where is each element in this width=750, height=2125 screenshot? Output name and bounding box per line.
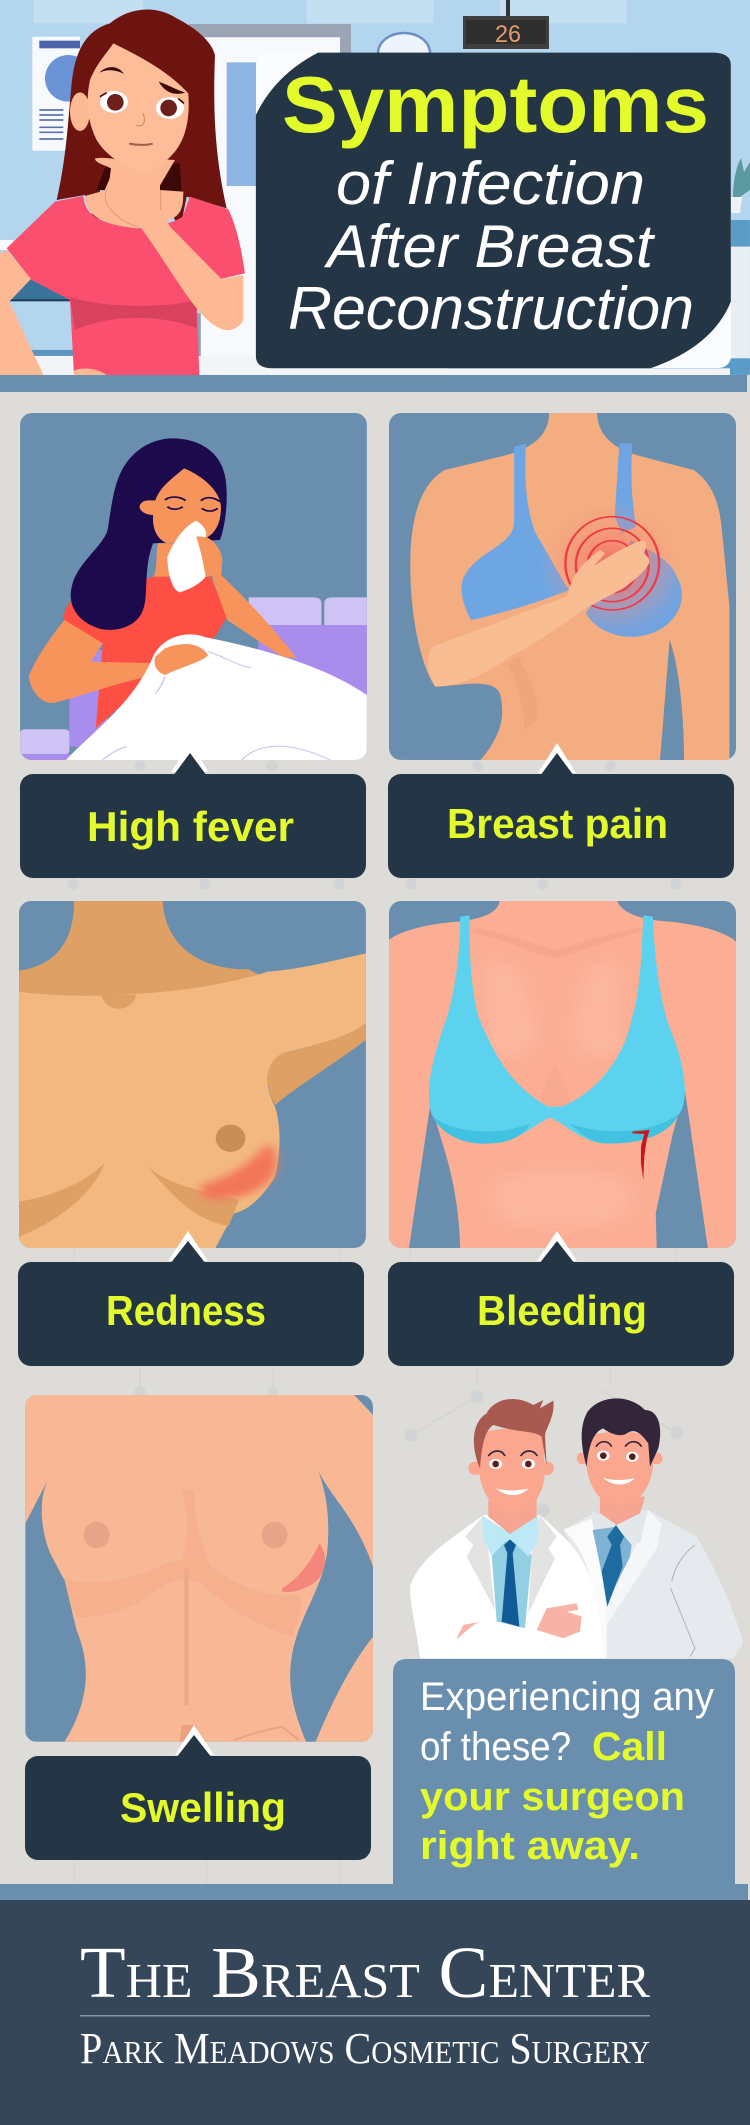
eyes and brows [99,67,185,145]
title subheading [288,150,694,342]
call to action text: right away. [420,1824,640,1868]
neck [107,163,160,200]
left arm [28,620,150,703]
footer strip [0,1884,748,1900]
label: high fever: High fever [87,803,294,850]
closed eyes [165,497,220,511]
torso [410,413,729,760]
crossed arms [537,1603,582,1638]
bra [429,915,685,1143]
title subheading: Reconstruction [288,275,694,342]
ear [70,92,90,131]
hand on tissue [196,536,222,577]
hair [71,438,227,630]
tissue [167,521,206,592]
panel: swelling [25,1395,373,1742]
areola [216,1125,245,1152]
shirt [64,577,227,728]
collar bones [471,927,643,958]
label: high fever [20,744,366,878]
footer logo line one: THE BREAST CENTER [80,1932,650,2013]
woman thinking [0,9,245,375]
pain glow [544,506,674,620]
centre line [184,1568,189,1705]
doctors [410,1398,743,1658]
panel: high fever [20,413,367,760]
breast folds [65,1560,301,1637]
right doctor [563,1398,743,1658]
call to action panel [393,1659,735,1884]
right arm [203,536,297,658]
panel: redness [19,901,366,1248]
areolae [84,1522,110,1548]
label: bleeding [388,1231,734,1366]
navel [234,1727,299,1740]
torso highlights [498,1174,626,1222]
footer rule [80,2015,650,2016]
cleavage [540,1065,572,1107]
forearm and hand [95,158,243,330]
body [25,1395,373,1742]
label: breast pain [388,743,734,878]
hair [57,9,227,232]
call to action text: of these? [420,1725,571,1769]
arms and torso [389,901,736,1248]
blood [632,1130,650,1180]
face [88,43,189,173]
floor number sign: 26 [495,21,521,48]
left arm [0,250,43,375]
bra [462,443,569,620]
call to action text [420,1675,714,1868]
left doctor [410,1399,603,1658]
shirt [7,196,245,375]
label: swelling: Swelling [120,1784,286,1831]
background network pattern [68,761,683,1884]
plant [731,158,750,213]
label: redness: Redness [106,1287,266,1334]
label: breast pain: Breast pain [447,800,668,847]
breast folds [19,1162,239,1237]
sternum notch [101,995,136,1009]
chest and arm [19,953,366,1248]
call to action text: your surgeon [420,1775,685,1819]
armpit shadow [268,1023,366,1105]
footer logo line two: PARK MEADOWS COSMETIC SURGERY [80,2024,650,2073]
label: redness [18,1231,364,1366]
call to action text: Call [592,1725,667,1769]
title subheading: of Infection [336,150,645,217]
office background [0,0,750,375]
title subheading: After Breast [324,213,655,280]
hand and arm [428,540,649,687]
neck and face [153,543,210,577]
header divider strip [0,375,747,392]
panel: breast pain [389,413,736,760]
panel: bleeding [389,901,736,1248]
title panel [256,53,731,368]
neck and shadow [19,901,258,1004]
swelling patch [282,1543,325,1592]
call to action text: Experiencing any [420,1675,714,1719]
footer [0,1900,750,2125]
label: bleeding: Bleeding [477,1287,647,1334]
floor number sign [463,0,549,49]
wall clock [378,33,430,73]
title heading: Symptoms [282,60,709,149]
bed [20,597,367,760]
redness patch [200,1143,277,1200]
pain rings [565,517,659,610]
header scene [0,0,750,375]
label: swelling [25,1725,371,1860]
blanket [66,634,367,760]
